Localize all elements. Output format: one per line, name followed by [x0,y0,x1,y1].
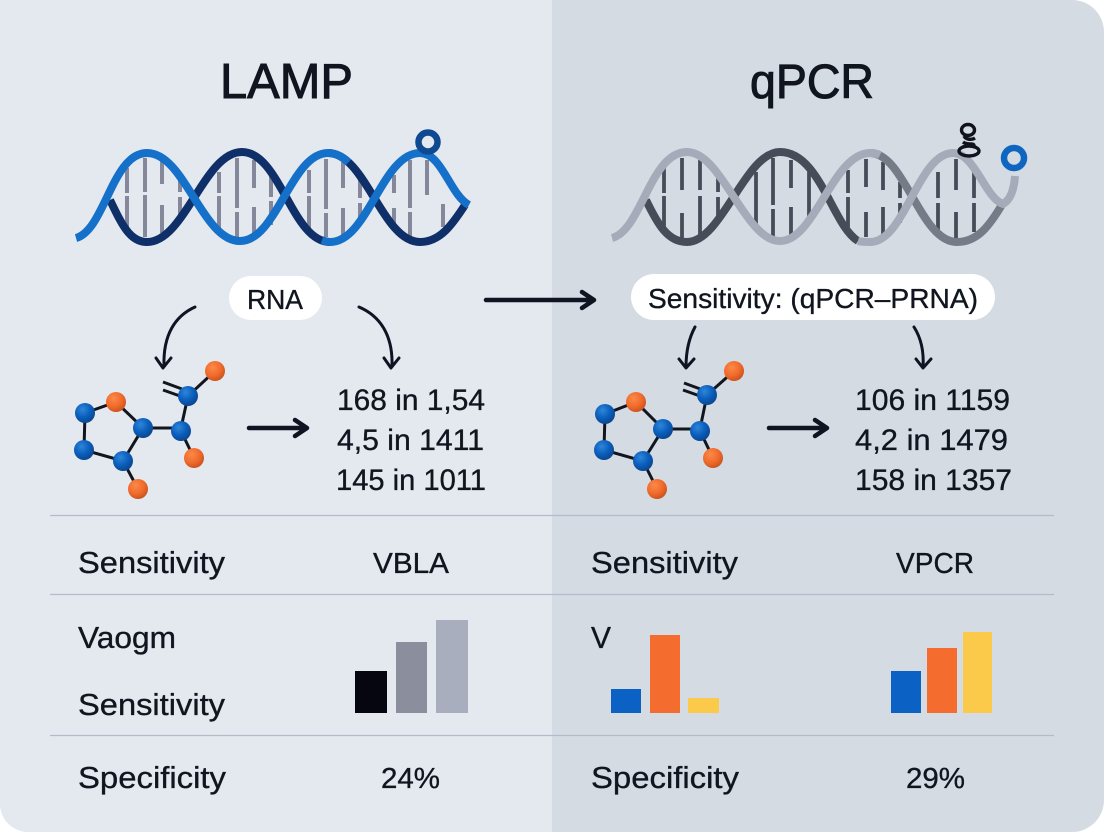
bar chart: qPCR colored bars two [891,632,992,713]
arrow: qPCR pill to numbers [914,327,931,368]
panel: LAMP [0,0,552,832]
icon: LAMP molecule [74,361,225,499]
arrow: between panels [486,292,594,308]
arrow: qPCR molecule to numbers [769,420,827,436]
row: sensitivity header: Sensitivity [78,545,226,580]
icon: small coil [959,124,979,156]
row labels: chart section: Vaogm [78,620,176,655]
row: sensitivity header: Sensitivity [591,545,739,580]
arrow: qPCR pill to molecule [679,327,695,368]
text block: LAMP numbers: 145 in 1011 [336,464,486,497]
panel: qPCR [552,0,1104,832]
label pill: RNA [229,276,322,320]
row labels: chart section: V [591,620,611,655]
text block: qPCR numbers: 106 in 1159 [855,384,1010,417]
bar chart: qPCR colored bars one [611,635,719,713]
row: specificity: 29% [906,763,965,795]
arrow: RNA to LAMP numbers [359,307,399,368]
row: specificity [78,760,965,795]
icon: LAMP DNA helix [76,132,469,242]
row: sensitivity header [78,545,974,580]
label pill: Sensitivity qPCR [631,274,995,320]
row: sensitivity header: VBLA [373,548,450,580]
row labels: chart section: Sensitivity [78,687,226,722]
label pill: Sensitivity qPCR: Sensitivity: (qPCR–PRNA) [648,283,978,314]
arrow: RNA to LAMP molecule [156,307,195,368]
text block: qPCR numbers: 158 in 1357 [855,464,1012,497]
text block: LAMP numbers [336,384,486,497]
title: qPCR: qPCR [750,56,874,109]
text block: LAMP numbers: 4,5 in 1411 [337,424,484,457]
row: specificity: Specificity [591,760,740,795]
bar chart: LAMP gray bars [355,620,468,713]
label pill: RNA: RNA [247,284,303,315]
row: specificity: 24% [381,763,440,795]
icon: qPCR molecule [594,361,744,499]
arrow: LAMP molecule to numbers [249,420,307,436]
row: specificity: Specificity [78,760,227,795]
row: sensitivity header: VPCR [896,548,974,580]
row labels: chart section [78,620,611,722]
text block: qPCR numbers [855,384,1012,497]
title: LAMP: LAMP [220,55,353,109]
text block: qPCR numbers: 4,2 in 1479 [855,424,1008,457]
icon: qPCR DNA helix [612,124,1024,242]
text block: LAMP numbers: 168 in 1,54 [337,384,485,417]
